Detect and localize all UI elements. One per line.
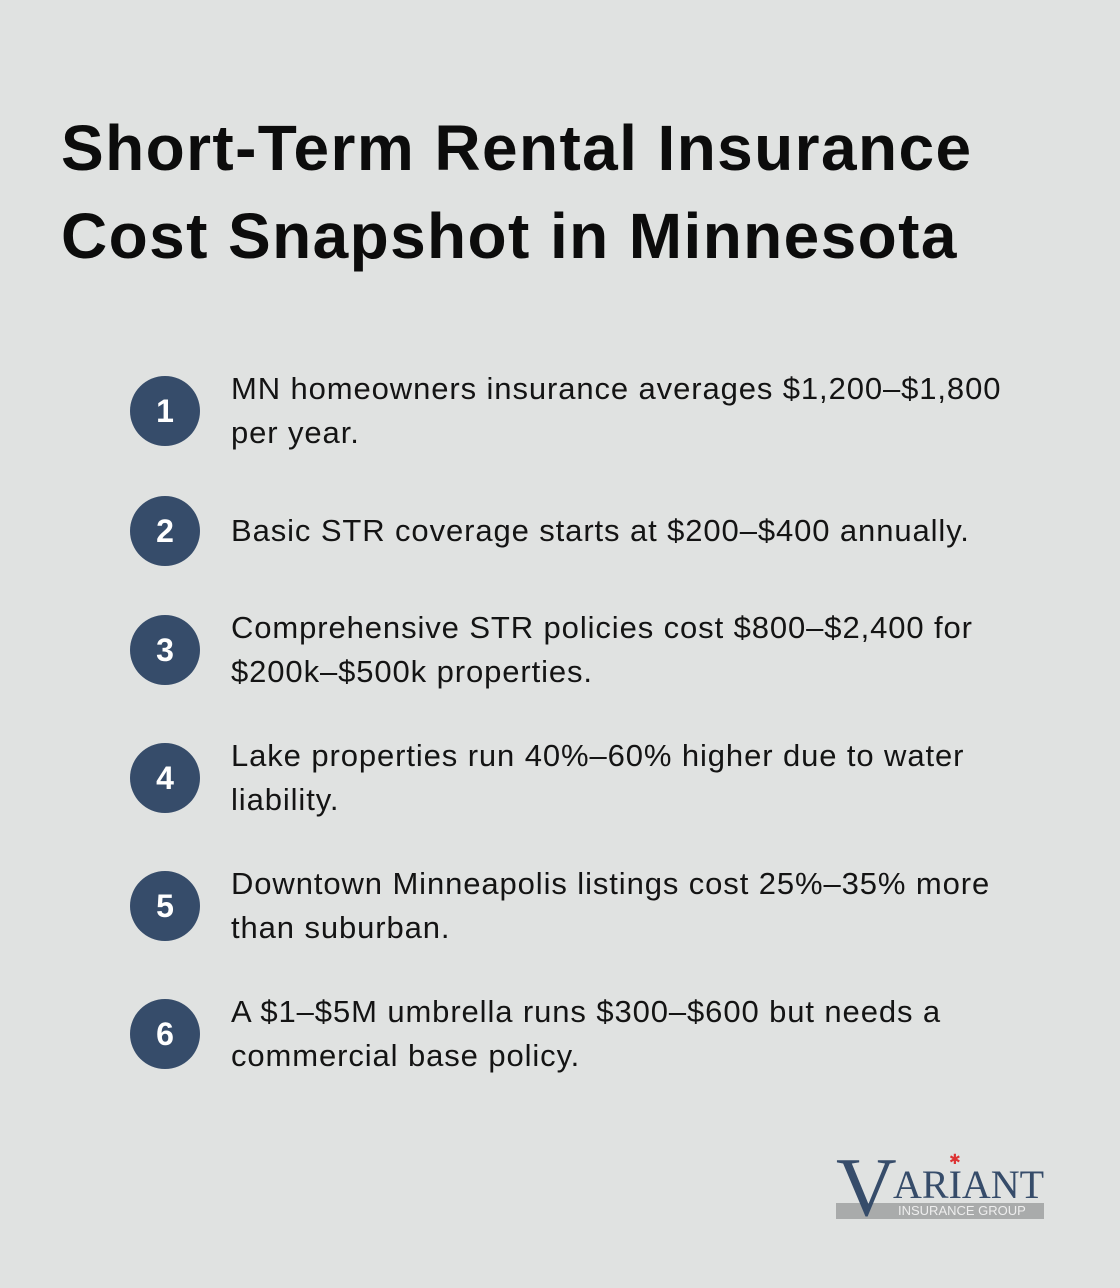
item 2 <box>130 496 970 566</box>
title: Short-Term Rental Insurance <box>61 112 972 184</box>
item 1: MN homeowners insurance averages $1,200–$1,800 per year. <box>231 371 1001 450</box>
item 6: 6 <box>156 1016 174 1052</box>
item 1: 1 <box>156 393 174 429</box>
item 6: A $1–$5M umbrella runs $300–$600 but needs a commercial base policy. <box>231 994 941 1073</box>
logo: INSURANCE GROUP <box>898 1203 1026 1218</box>
logo: V <box>836 1141 897 1234</box>
title: Cost Snapshot in Minnesota <box>61 200 958 272</box>
logo <box>836 1141 1044 1234</box>
item 2: 2 <box>156 513 174 549</box>
item 4: 4 <box>156 760 174 796</box>
item 2: Basic STR coverage starts at $200–$400 annually. <box>231 513 970 548</box>
title <box>61 112 972 272</box>
item 3: 3 <box>156 632 174 668</box>
item 5: Downtown Minneapolis listings cost 25%–35% more than suburban. <box>231 866 990 945</box>
item 3: Comprehensive STR policies cost $800–$2,400 for $200k–$500k properties. <box>231 610 973 689</box>
item 5: 5 <box>156 888 174 924</box>
logo: ✱ <box>949 1151 961 1167</box>
logo: ARIANT <box>893 1162 1044 1207</box>
item 4: Lake properties run 40%–60% higher due to water liability. <box>231 738 964 817</box>
